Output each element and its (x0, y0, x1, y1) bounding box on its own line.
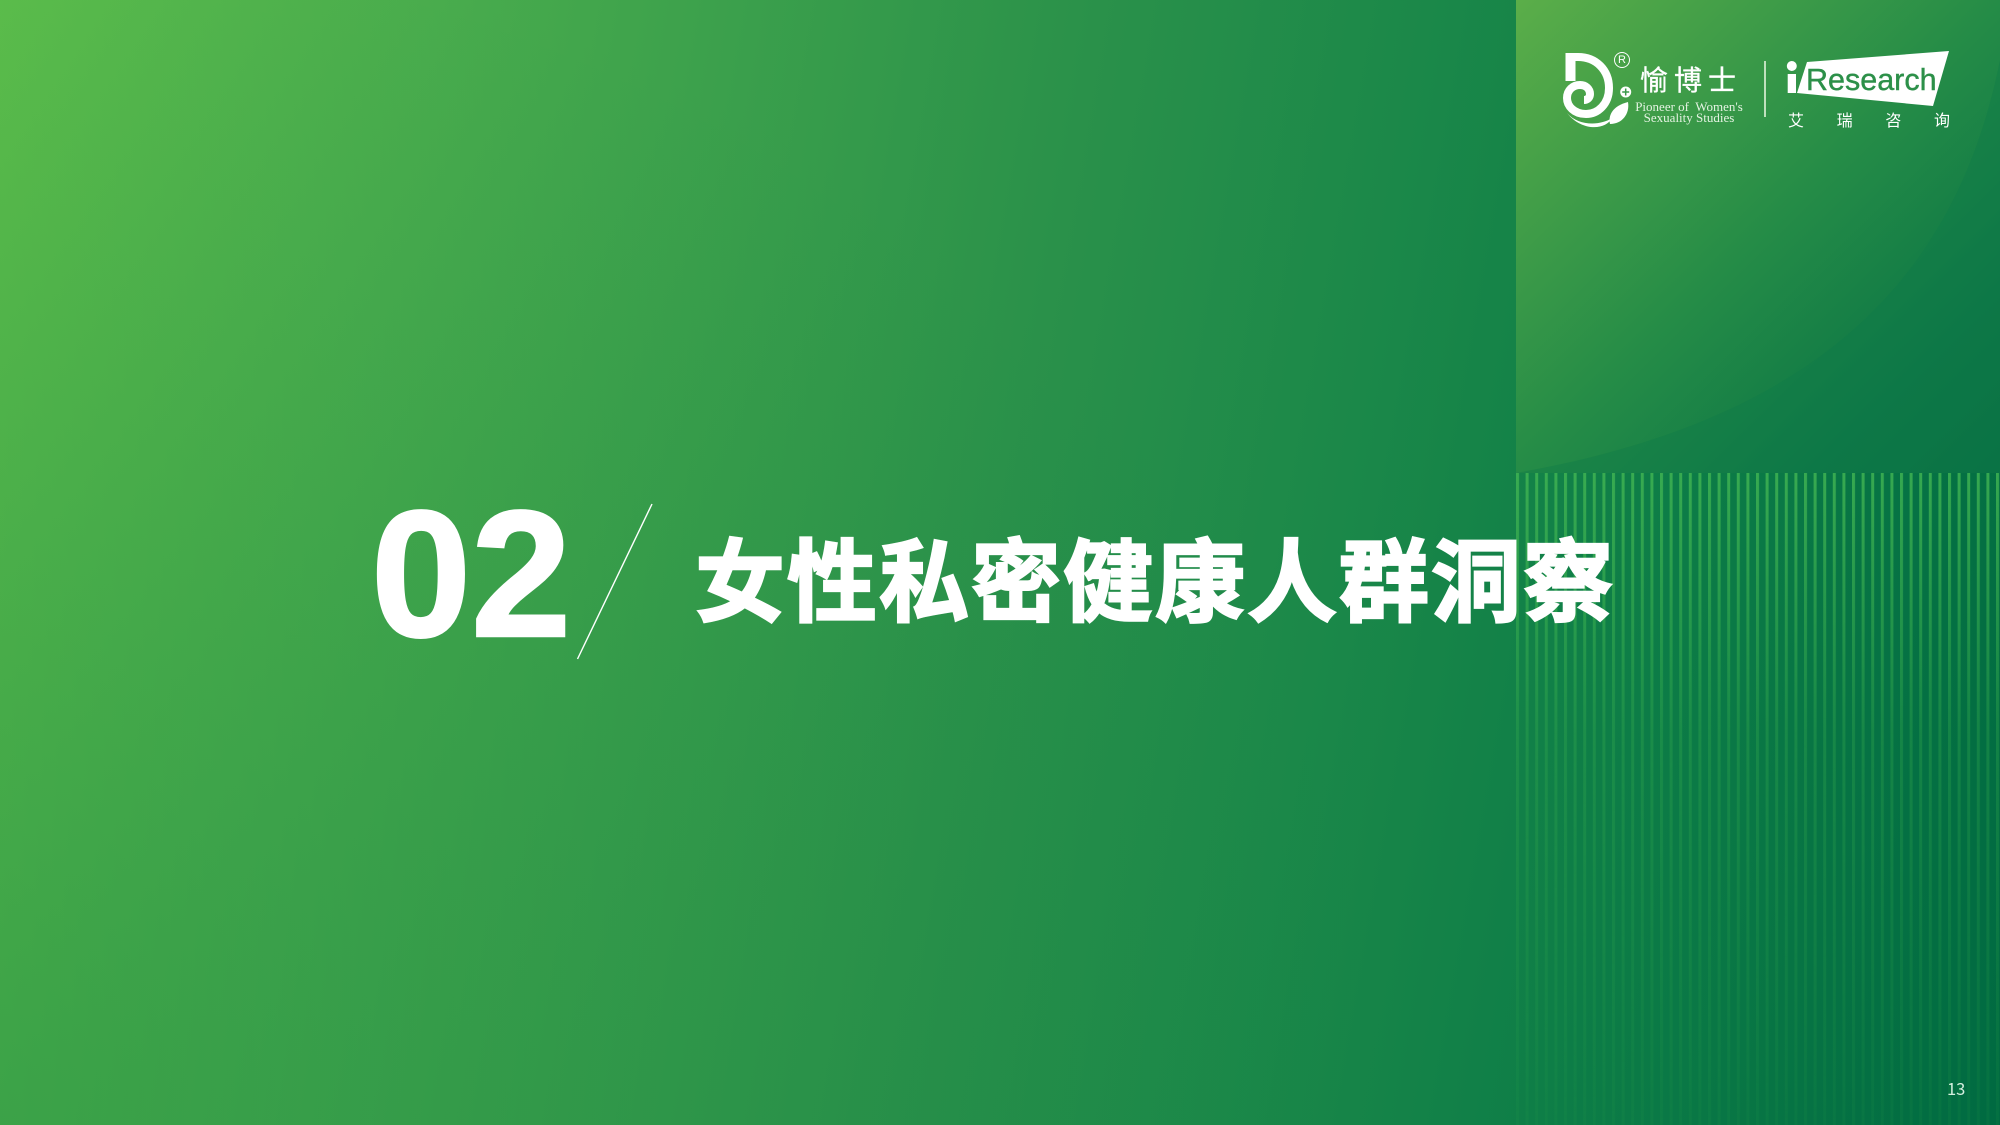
logo text: tagline: Pioneer of Women's (1635, 99, 1743, 114)
logo text: Chinese name: 询 (1934, 113, 1950, 130)
logo text: Chinese name: 艾 (1788, 113, 1804, 130)
page number: 13 (1947, 1076, 1965, 1100)
logo text: iResearch: Research (1806, 63, 1937, 97)
logo: Dr. Yu (1563, 52, 1743, 128)
logo divider (1764, 61, 1766, 117)
section number: 02 (371, 474, 571, 675)
decorative panel: vertical stripes (1516, 473, 2000, 1076)
icon: registered mark (1614, 52, 1630, 68)
icon: D swirl mark (1563, 53, 1632, 128)
logo text: tagline (1635, 99, 1743, 125)
section title: 女性私密健康人群洞察 (695, 534, 1615, 634)
logo text: Chinese name (1788, 112, 1950, 130)
logo text: Chinese name: 瑞 (1837, 113, 1853, 130)
decorative panel: top right lighter block (1516, 0, 2000, 473)
icon: iResearch white badge (1786, 51, 1949, 106)
slash divider (576, 504, 653, 660)
logo text: tagline: Sexuality Studies (1644, 110, 1734, 125)
icon: registered mark: R (1618, 54, 1626, 66)
logo text: brand name: 愉博士 (1640, 65, 1742, 96)
logo: iResearch (1786, 51, 1950, 130)
logo text: Chinese name: 咨 (1885, 113, 1901, 130)
